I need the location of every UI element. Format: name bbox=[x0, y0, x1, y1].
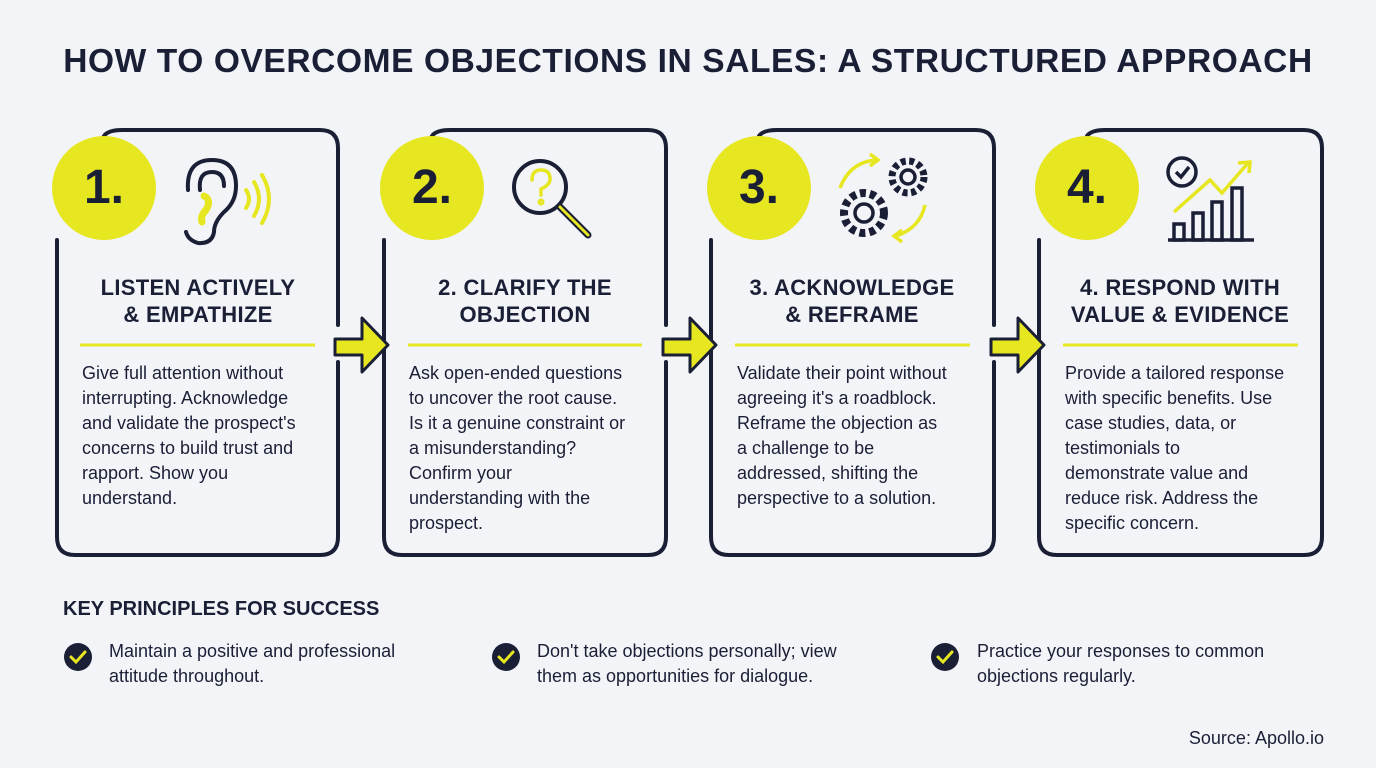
panel 4 text: demonstrate value and bbox=[1065, 463, 1248, 483]
panel 3 text: Validate their point without bbox=[737, 363, 947, 383]
text: 2. bbox=[412, 161, 452, 214]
text: 4. bbox=[1067, 161, 1107, 214]
panel 1 text bbox=[82, 363, 296, 508]
panel 2 text: a misunderstanding? bbox=[409, 438, 576, 458]
panel 2 heading bbox=[438, 275, 612, 327]
title: HOW TO OVERCOME OBJECTIONS IN SALES: A STRUCTURED APPROACH bbox=[63, 43, 1313, 80]
key principles heading: KEY PRINCIPLES FOR SUCCESS bbox=[63, 598, 379, 620]
icon: gears bbox=[840, 154, 925, 242]
panel 4 heading: VALUE & EVIDENCE bbox=[1071, 302, 1289, 327]
panel 4 text: Provide a tailored response bbox=[1065, 363, 1284, 383]
step numbers: 1. bbox=[84, 161, 124, 214]
panel 2 text: Confirm your bbox=[409, 463, 512, 483]
text: 3. bbox=[739, 161, 779, 214]
icon: magnifier bbox=[514, 161, 588, 235]
panel 2 heading: OBJECTION bbox=[459, 302, 591, 327]
panel 4 text: case studies, data, or bbox=[1065, 413, 1236, 433]
panel 4 text: specific concern. bbox=[1065, 513, 1199, 533]
panel 3 text: perspective to a solution. bbox=[737, 488, 936, 508]
panel 3 text: addressed, shifting the bbox=[737, 463, 918, 483]
panel 2 text: Is it a genuine constraint or bbox=[409, 413, 625, 433]
principle 1: Maintain a positive and professional attitude throughout. bbox=[109, 641, 395, 686]
panel 1 text: and validate the prospect's bbox=[82, 413, 296, 433]
panel 3 text: Reframe the objection as bbox=[737, 413, 937, 433]
panel 2 text: Ask open-ended questions bbox=[409, 363, 622, 383]
arrows bbox=[335, 318, 1044, 372]
panel 4 text: with specific benefits. Use bbox=[1065, 388, 1272, 408]
panel 1 heading: & EMPATHIZE bbox=[123, 302, 273, 327]
panel 2 text: to uncover the root cause. bbox=[409, 388, 617, 408]
panel 3 text: agreeing it's a roadblock. bbox=[737, 388, 937, 408]
panel 4 heading bbox=[1071, 275, 1289, 327]
panel 2 text bbox=[409, 363, 625, 533]
panel 1 text: rapport. Show you bbox=[82, 463, 228, 483]
panel 1 text: interrupting. Acknowledge bbox=[82, 388, 288, 408]
panel 1 text: understand. bbox=[82, 488, 177, 508]
panel 3 heading: & REFRAME bbox=[785, 302, 919, 327]
panel 2 text: understanding with the bbox=[409, 488, 590, 508]
check icons bbox=[64, 643, 959, 671]
panel 4 text: reduce risk. Address the bbox=[1065, 488, 1258, 508]
panel 1 text: Give full attention without bbox=[82, 363, 283, 383]
panel 2 text: prospect. bbox=[409, 513, 483, 533]
panel 1 text: concerns to build trust and bbox=[82, 438, 293, 458]
source: Source: Apollo.io bbox=[1189, 728, 1324, 748]
principle 3: Practice your responses to common objections regularly. bbox=[977, 641, 1264, 686]
panel 2 heading: 2. CLARIFY THE bbox=[438, 275, 612, 300]
panel 4 text: testimonials to bbox=[1065, 438, 1180, 458]
icon: chart bbox=[1168, 158, 1254, 240]
panel 3 heading bbox=[749, 275, 955, 327]
panel 4 heading: 4. RESPOND WITH bbox=[1080, 275, 1280, 300]
panel 3 text: a challenge to be bbox=[737, 438, 874, 458]
principle 2: Don't take objections personally; view them as opportunities for dialogue. bbox=[537, 641, 837, 686]
panel 4 text bbox=[1065, 363, 1284, 533]
panel 3 heading: 3. ACKNOWLEDGE bbox=[749, 275, 955, 300]
panel 3 text bbox=[737, 363, 947, 508]
panel 1 heading bbox=[101, 275, 295, 327]
panel 1 heading: LISTEN ACTIVELY bbox=[101, 275, 295, 300]
icon: ear bbox=[186, 160, 269, 243]
